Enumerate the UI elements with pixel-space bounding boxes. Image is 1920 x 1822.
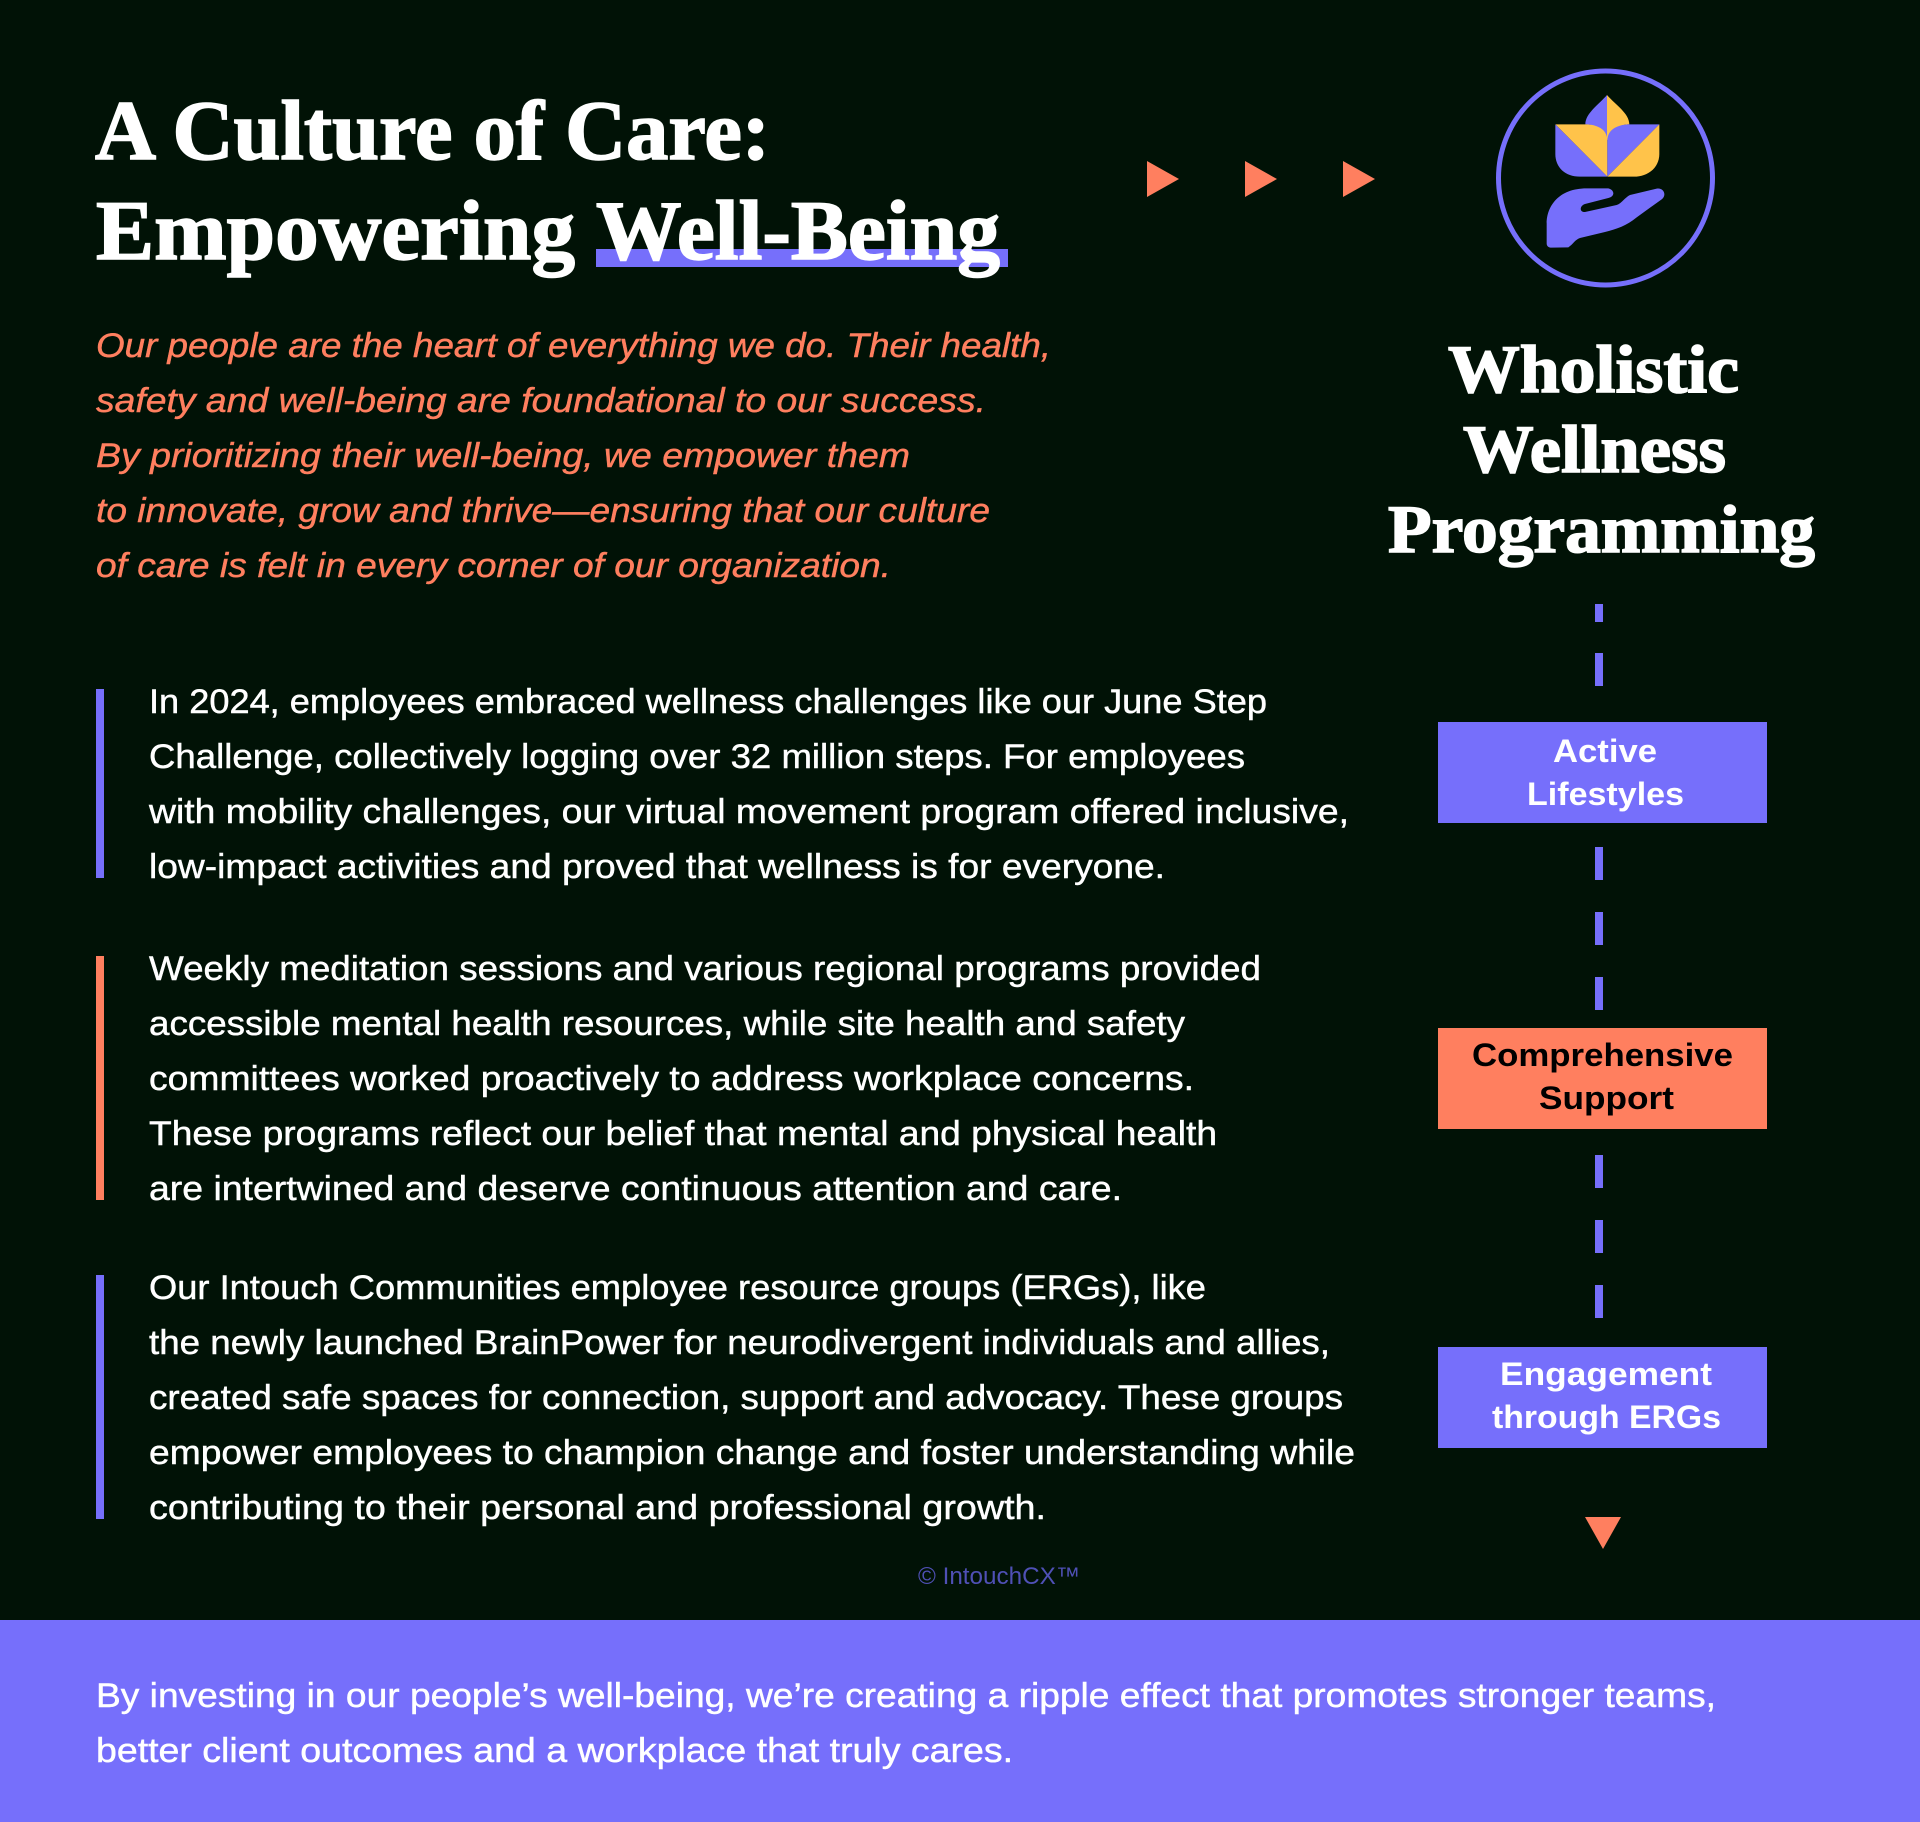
heading: Wholistic Wellness Programming: Programming (1388, 491, 1815, 567)
paragraph 2: mental health: accessible mental health resources, while site health and safety (149, 1005, 1185, 1043)
box: Active Lifestyles: Lifestyles (1527, 776, 1684, 812)
intro statement: safety and well-being are foundational to our success. (96, 382, 986, 420)
title (95, 84, 1008, 278)
footer band (0, 1620, 1920, 1822)
dashed connector: heading to Active Lifestyles (1595, 604, 1603, 686)
paragraph 2: mental health: These programs reflect our belief that mental and physical health (149, 1115, 1217, 1153)
box: Engagement through ERGs: through ERGs (1492, 1399, 1721, 1435)
paragraph 1: step challenge: Challenge, collectively logging over 32 million steps. For employees (149, 738, 1245, 776)
footer band: better client outcomes and a workplace that truly cares. (96, 1732, 1013, 1770)
paragraph 3: employee resource groups: empower employees to champion change and foster understanding while (149, 1434, 1355, 1472)
paragraph 2: mental health: committees worked proactively to address workplace concerns. (149, 1060, 1194, 1098)
paragraph 3: employee resource groups: created safe spaces for connection, support and advocacy. These groups (149, 1379, 1343, 1417)
arrow: down triangle (1585, 1517, 1621, 1549)
intro statement: of care is felt in every corner of our organization. (96, 547, 891, 585)
box: Active Lifestyles: Active (1553, 733, 1657, 769)
paragraph 3: employee resource groups: contributing to their personal and professional growth. (149, 1489, 1046, 1527)
footer band: By investing in our people’s well-being, we’re creating a ripple effect that promotes stronger teams, (96, 1677, 1716, 1715)
intro statement: Our people are the heart of everything we do. Their health, (96, 327, 1051, 365)
paragraph 1: step challenge: with mobility challenges, our virtual movement program offered inclusive, (148, 793, 1349, 831)
intro statement: to innovate, grow and thrive—ensuring that our culture (96, 492, 990, 530)
paragraph 1: step challenge (96, 683, 1349, 886)
paragraph 1: step challenge: In 2024, employees embraced wellness challenges like our June Step (149, 683, 1267, 721)
box: Comprehensive Support: Support (1539, 1080, 1674, 1116)
paragraph 1: step challenge: low-impact activities and proved that wellness is for everyone. (149, 848, 1165, 886)
box: Active Lifestyles (1438, 722, 1767, 823)
dashed connector: Comprehensive Support to Engagement through ERGs (1595, 1155, 1603, 1318)
arrows: three coral triangles (1147, 161, 1375, 197)
intro statement (96, 327, 1051, 585)
dashed connector: Active Lifestyles to Comprehensive Support (1595, 847, 1603, 1010)
paragraph 2: mental health (96, 950, 1261, 1208)
paragraph 3: employee resource groups: Our Intouch Communities employee resource groups (ERGs), like (149, 1269, 1206, 1307)
box: Comprehensive Support: Comprehensive (1472, 1037, 1733, 1073)
paragraph 2: mental health: Weekly meditation sessions and various regional programs provided (149, 950, 1261, 988)
box: Comprehensive Support (1438, 1028, 1767, 1129)
heading: Wholistic Wellness Programming: Wholistic (1448, 331, 1739, 407)
copyright: © IntouchCX™ (918, 1563, 1080, 1590)
title: Empowering (96, 184, 575, 278)
heading: Wholistic Wellness Programming: Wellness (1463, 411, 1726, 487)
paragraph 3: employee resource groups: the newly launched BrainPower for neurodivergent individuals and allies, (149, 1324, 1330, 1362)
title: Well-Being (596, 184, 1000, 278)
heading: Wholistic Wellness Programming (1388, 331, 1815, 567)
title: A Culture of Care: (95, 84, 770, 178)
paragraph 2: mental health: are intertwined and deserve continuous attention and care. (149, 1170, 1122, 1208)
intro statement: By prioritizing their well-being, we empower them (96, 437, 910, 475)
paragraph 3: employee resource groups (96, 1269, 1355, 1527)
box: Engagement through ERGs (1438, 1347, 1767, 1448)
icon: hand holding lotus in circle (1498, 71, 1712, 285)
box: Engagement through ERGs: Engagement (1500, 1356, 1712, 1392)
